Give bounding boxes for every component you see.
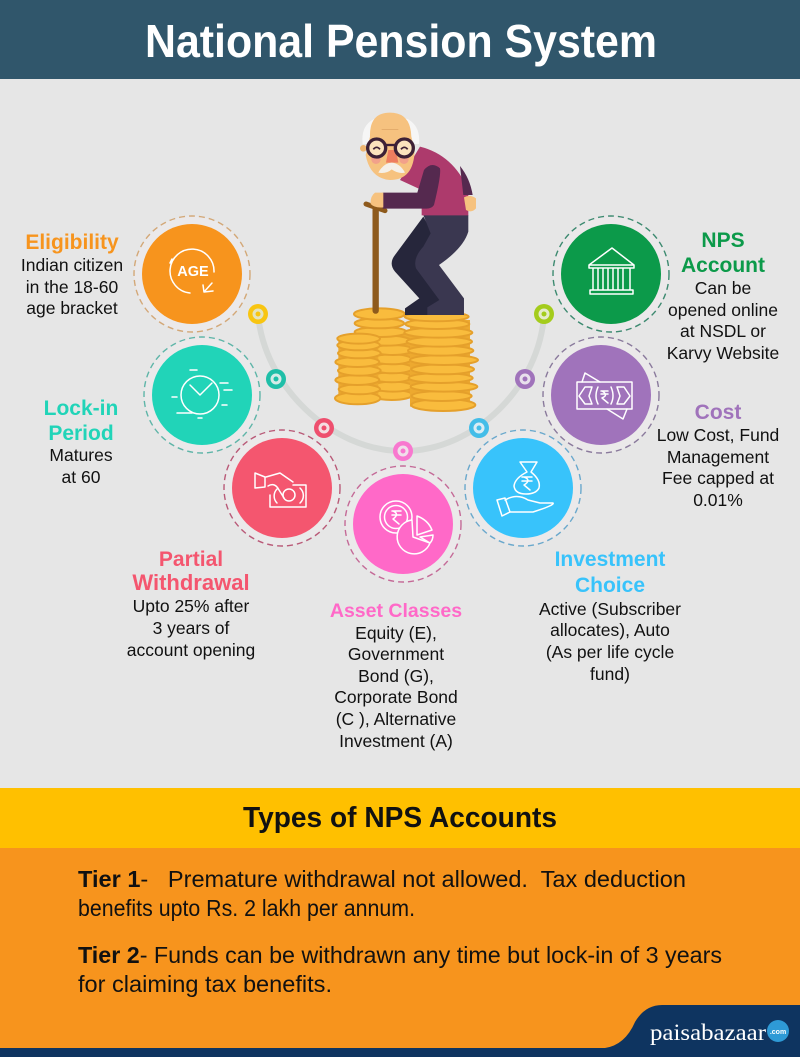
nps body: at NSDL or [680,321,766,341]
investment body: (As per life cycle [546,642,674,662]
partial body: Upto 25% after [133,596,250,616]
item: Asset Classes [330,466,462,751]
tier 2 text: for claiming tax benefits. [78,971,332,997]
lock-in circle [152,345,252,445]
tier 1 text: benefits upto Rs. 2 lakh per annum. [78,895,415,921]
investment heading: Choice [575,574,645,597]
investment body: fund) [590,664,630,684]
cane [366,210,385,311]
sleeve [383,165,440,209]
nps body [667,278,779,363]
connecting arc [258,314,544,451]
partial ring [224,430,340,546]
icon: bank [589,248,634,294]
glasses [368,139,413,157]
asset ring [345,466,461,582]
nps circle [561,224,661,324]
asset body: Bond (G), [358,666,434,686]
moustache [378,163,405,173]
page background [0,79,800,788]
icon: age: AGE [177,264,209,280]
eligibility heading: Eligibility [25,231,119,254]
cost body: Fee capped at [662,468,774,488]
asset circle [353,474,453,574]
item: NPS Account [553,216,779,363]
investment circle [473,438,573,538]
footer brand: paisabazaar logo [0,1005,800,1057]
nps heading: NPS [701,229,745,252]
asset body: (C ), Alternative [336,709,456,729]
cost circle [551,345,651,445]
tier 2 text: Tier 2- Funds can be withdrawn any time but lock-in of 3 years [78,942,722,968]
lock-in heading [44,397,118,445]
torso [400,147,468,215]
lock-in body [49,445,113,487]
item: Cost [543,337,779,510]
investment heading [555,548,665,597]
asset body: Investment (A) [339,731,453,751]
lock-in heading: Lock-in [44,397,118,420]
partial heading: Withdrawal [132,570,250,595]
asset body [334,623,458,751]
far leg [392,217,442,315]
nps body: opened online [668,300,778,320]
section header: Types of NPS Accounts: Types of NPS Accounts [243,802,557,834]
partial circle [232,438,332,538]
hand on cane [371,193,383,208]
cost body: 0.01% [693,490,743,510]
footer brand: paisabazaar logo: paisabazaar [650,1020,766,1045]
hair [362,116,419,144]
tier 1 text: Tier 1- Premature withdrawal not allowed. Tax deduction [78,866,686,892]
near leg [415,215,468,315]
icon: banknote [577,373,632,419]
lock-in body: Matures [49,445,113,465]
icon: hand with money [255,473,306,507]
illustration: old man on coins [335,113,478,411]
asset body: Government [348,644,444,664]
investment body [539,599,681,684]
middle coins [354,308,413,400]
investment ring [465,430,581,546]
icon: hand with money bag [497,462,553,516]
nps heading [681,229,765,277]
eligibility body [21,255,123,318]
item: Lock-in Period [44,337,260,487]
lock-in ring [144,337,260,453]
right coins [404,312,478,411]
title banner [0,0,800,79]
icon: coin and pie [380,501,433,554]
cost body [657,425,779,510]
eligibility body: age bracket [26,298,118,318]
investment body: allocates), Auto [550,620,670,640]
section header: Types of NPS Accounts [0,788,800,848]
partial body: account opening [127,640,255,660]
investment body: Active (Subscriber [539,599,681,619]
item: Eligibility [21,216,250,332]
partial heading [132,548,250,595]
eligibility body: in the 18-60 [26,277,118,297]
investment heading: Investment [555,548,665,571]
ear [360,145,367,152]
cost heading: Cost [695,401,741,424]
timeline dots [248,304,554,461]
left coins [335,334,381,404]
hand right [464,196,476,211]
nps body: Karvy Website [667,343,779,363]
head [366,113,415,180]
asset heading: Asset Classes [330,600,462,622]
panel: account types [0,848,800,1057]
eligibility ring [134,216,250,332]
cheeks nose [371,155,381,164]
asset body: Corporate Bond [334,687,458,707]
lock-in heading: Period [48,422,114,445]
eligibility body: Indian citizen [21,255,123,275]
icon: clock [172,370,232,418]
item: Investment Choice [465,430,681,684]
eligibility circle [142,224,242,324]
lock-in body: at 60 [62,467,101,487]
partial body [127,596,255,660]
cost body: Low Cost, Fund [657,425,779,445]
partial body: 3 years of [153,618,230,638]
icon: age [170,249,214,293]
title banner: National Pension System [145,15,657,67]
asset body: Equity (E), [355,623,437,643]
footer brand: paisabazaar logo: .com [770,1029,786,1036]
tier 1 text [78,866,686,921]
nps heading: Account [681,254,765,277]
item: Partial Withdrawal [127,430,340,660]
cost ring [543,337,659,453]
nps ring [553,216,669,332]
partial heading: Partial [159,548,223,571]
tier 2 text [78,942,722,997]
nps body: Can be [695,278,751,298]
cost body: Management [667,447,769,467]
